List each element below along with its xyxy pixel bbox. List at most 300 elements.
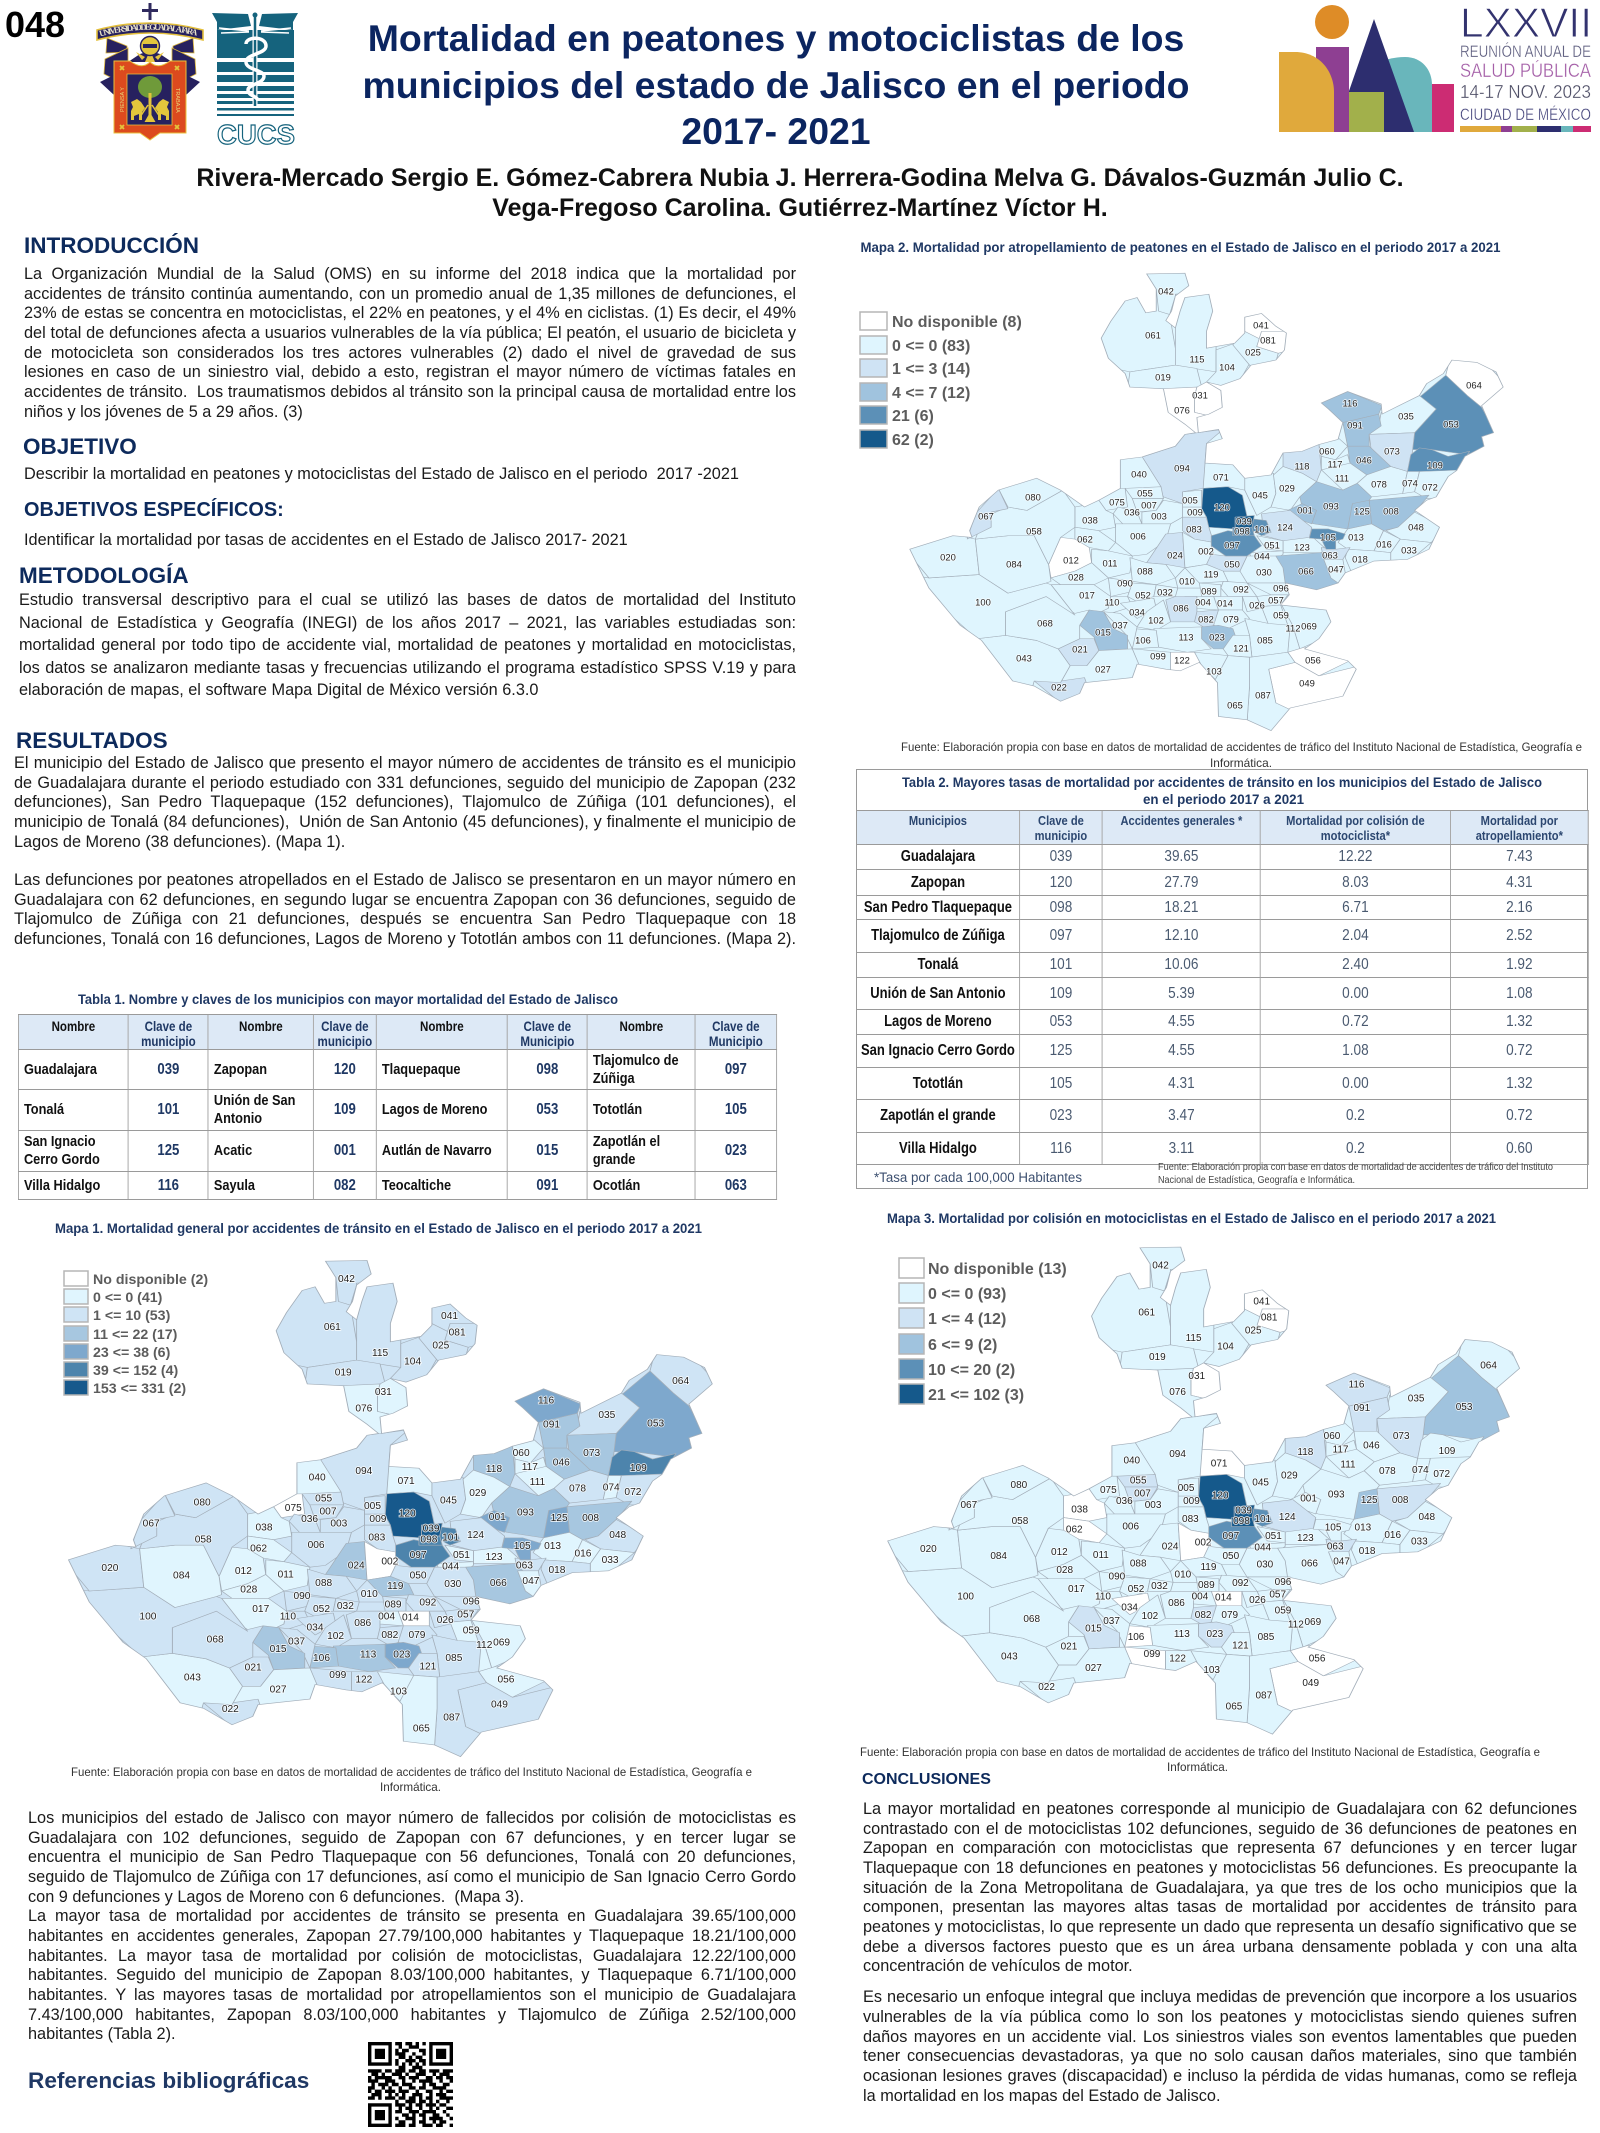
logo: Universidad de Guadalajara crest: PIENSA Y bbox=[120, 87, 126, 112]
map 1: mortalidad general: 124 bbox=[467, 1530, 484, 1541]
map 2: atropellamiento de peatones: 120 bbox=[1214, 502, 1230, 512]
map 3: colisión en motociclistas: 009 bbox=[1183, 1496, 1200, 1507]
map 3: colisión en motociclistas: 066 bbox=[1301, 1559, 1318, 1570]
map 3: colisión en motociclistas: 031 bbox=[1188, 1371, 1206, 1382]
map 1: mortalidad general: 018 bbox=[548, 1565, 566, 1576]
table 2: mayores tasas de mortalidad: 0.60 bbox=[1506, 1140, 1533, 1156]
map 1: mortalidad general: 118 bbox=[486, 1464, 502, 1475]
map 3: colisión en motociclistas: 089 bbox=[1198, 1580, 1215, 1591]
map 2: atropellamiento de peatones: 106 bbox=[1135, 634, 1151, 646]
map 3: colisión en motociclistas: 042 bbox=[1152, 1260, 1169, 1271]
map 3: colisión en motociclistas: 111 bbox=[1340, 1460, 1356, 1471]
map 3: colisión en motociclistas: 105 bbox=[1325, 1522, 1342, 1533]
caption: tabla 2 title: Tabla 2. Mayores tasas de mortalidad por accidentes de tránsito en los municipios del Estado de Jalisco bbox=[902, 775, 1542, 790]
map 1: mortalidad general: 010 bbox=[361, 1589, 378, 1600]
map 3: colisión en motociclistas: 006 bbox=[1122, 1521, 1139, 1532]
map 2: atropellamiento de peatones: 047 bbox=[1328, 564, 1344, 574]
table 2: mayores tasas de mortalidad: 0.2 bbox=[1346, 1107, 1365, 1124]
map 2: atropellamiento de peatones: 117 bbox=[1328, 458, 1342, 470]
map 1: mortalidad general: 116 bbox=[538, 1396, 555, 1407]
map 2: atropellamiento de peatones: 092 bbox=[1233, 584, 1249, 594]
map 3: colisión en motociclistas: 028 bbox=[1056, 1565, 1073, 1576]
map 3: colisión en motociclistas: 055 bbox=[1130, 1476, 1147, 1487]
map 2: atropellamiento de peatones: 057 bbox=[1268, 594, 1284, 606]
map 2: atropellamiento de peatones: 018 bbox=[1352, 554, 1368, 564]
map 3: colisión en motociclistas: 015 bbox=[1085, 1624, 1102, 1635]
table 1: municipios y claves: Zapopan bbox=[214, 1060, 267, 1078]
text: conclusiones párrafo 1: debe a diversos factores puesto que es un área urbana densamente poblada y con una alta bbox=[863, 1938, 1577, 1956]
map 3: colisión en motociclistas: 047 bbox=[1333, 1557, 1350, 1568]
table 2: mayores tasas de mortalidad: 116 bbox=[1050, 1140, 1072, 1156]
map 1: mortalidad general: 078 bbox=[569, 1484, 586, 1495]
map 1: mortalidad general: 047 bbox=[522, 1576, 540, 1587]
map 3: colisión en motociclistas: 064 bbox=[1480, 1361, 1497, 1372]
table 2: mayores tasas de mortalidad: 0.2 bbox=[1346, 1140, 1365, 1156]
table 2: mayores tasas de mortalidad bbox=[856, 769, 1588, 1189]
table 2: mayores tasas de mortalidad: 12.22 bbox=[1338, 848, 1372, 865]
map 1: mortalidad general: 091 bbox=[543, 1420, 560, 1431]
table 2: mayores tasas de mortalidad: 3.47 bbox=[1168, 1107, 1195, 1124]
map 3: colisión en motociclistas: 109 bbox=[1439, 1446, 1456, 1457]
map 3: colisión en motociclistas: 037 bbox=[1103, 1616, 1120, 1627]
map 2: atropellamiento de peatones: 098 bbox=[1234, 526, 1250, 536]
map 1: mortalidad general: 085 bbox=[445, 1653, 463, 1664]
map 1: mortalidad general: 083 bbox=[368, 1532, 386, 1543]
map 3: colisión en motociclistas: 118 bbox=[1297, 1447, 1314, 1458]
table 2: mayores tasas de mortalidad: San Pedro Tlaquepaque bbox=[864, 898, 1012, 916]
map 3: colisión en motociclistas: 013 bbox=[1355, 1522, 1372, 1533]
table 2: mayores tasas de mortalidad: Municipios bbox=[909, 813, 967, 828]
heading: metodología: METODOLOGÍA bbox=[19, 563, 189, 588]
map 1: mortalidad general: 075 bbox=[285, 1503, 302, 1514]
map 1: mortalidad general: 109 bbox=[630, 1463, 647, 1474]
text: introducción: accidentes de tránsito continúa aumentando, con un promedio anual de 1,35 millones de defunciones, el bbox=[24, 285, 796, 303]
map 3: colisión en motociclistas: 065 bbox=[1226, 1701, 1243, 1712]
text: introducción: del total de defunciones afecta a usuarios vulnerables de la vía pública; El peatón, el usuario de bicicleta y bbox=[24, 324, 796, 342]
table 1: municipios y claves: Antonio bbox=[214, 1110, 262, 1127]
authors: Rivera-Mercado Sergio E. Gómez-Cabrera Nubia J. Herrera-Godina Melva G. Dávalos-Guzmán Julio C. bbox=[196, 164, 1404, 192]
map 2: atropellamiento de peatones: 036 bbox=[1124, 506, 1140, 518]
legend: map 2: 4 <= 7 (12) bbox=[892, 385, 970, 402]
map 2: atropellamiento de peatones: 062 bbox=[1077, 534, 1093, 544]
table 2: mayores tasas de mortalidad: Zapopan bbox=[911, 874, 965, 890]
map 3: colisión en motociclistas: 048 bbox=[1418, 1512, 1436, 1523]
table 2: mayores tasas de mortalidad: 053 bbox=[1050, 1013, 1072, 1030]
map 1: mortalidad general: 073 bbox=[583, 1448, 601, 1459]
map 1: mortalidad general: 087 bbox=[443, 1713, 461, 1724]
table 2: mayores tasas de mortalidad: 8.03 bbox=[1342, 874, 1369, 890]
map 2: atropellamiento de peatones: 030 bbox=[1256, 566, 1272, 578]
map 3: colisión en motociclistas: 036 bbox=[1116, 1496, 1133, 1507]
table 1: municipios y claves: Villa Hidalgo bbox=[24, 1176, 100, 1194]
table 2: mayores tasas de mortalidad: Tlajomulco de Zúñiga bbox=[871, 927, 1005, 944]
map 3: colisión en motociclistas: 011 bbox=[1093, 1550, 1109, 1561]
map 3: colisión en motociclistas: 080 bbox=[1011, 1480, 1028, 1491]
text: resultados párrafo 1: municipio de Tonalá (84 defunciones), Unión de San Antonio (45 defunciones), y finalmente el municipio de bbox=[14, 813, 796, 831]
title: 2017- 2021 bbox=[681, 110, 871, 152]
text: tasas y motociclistas: habitantes. Y las mayores tasas de mortalidad por atropellamientos son el municipio de Guadalajara bbox=[28, 1986, 796, 2004]
map 2: atropellamiento de peatones: 058 bbox=[1026, 526, 1042, 536]
map 2: atropellamiento de peatones: 055 bbox=[1137, 488, 1153, 498]
map 2: atropellamiento de peatones: 035 bbox=[1398, 410, 1414, 422]
map 1: mortalidad general: 071 bbox=[398, 1476, 415, 1487]
table 2: mayores tasas de mortalidad: 105 bbox=[1050, 1074, 1072, 1092]
map 1: mortalidad general: 056 bbox=[497, 1675, 515, 1686]
text: resultados párrafo 1: Lagos de Moreno (38 defunciones). (Mapa 1). bbox=[14, 833, 345, 851]
text: conclusiones párrafo 2: Es necesario un enfoque integral que incluya medidas de prevención que incorpore a los usuarios bbox=[863, 1988, 1577, 2006]
text: tasas y motociclistas: habitantes (Tabla 2). bbox=[28, 2025, 176, 2043]
source: mapa 1 line 2: Informática. bbox=[380, 1780, 441, 1794]
map 1: mortalidad general: 020 bbox=[101, 1563, 119, 1574]
table 1: municipios y claves: Tototlán bbox=[593, 1101, 642, 1118]
map 3: colisión en motociclistas: 022 bbox=[1038, 1682, 1055, 1693]
map 3: colisión en motociclistas: 073 bbox=[1393, 1431, 1410, 1442]
map 2: atropellamiento de peatones: 061 bbox=[1145, 330, 1161, 340]
map 2: atropellamiento de peatones: 025 bbox=[1245, 346, 1261, 358]
map 2: atropellamiento de peatones: 028 bbox=[1068, 572, 1084, 582]
title: municipios del estado de Jalisco en el periodo bbox=[363, 64, 1189, 106]
map 2: atropellamiento de peatones: 005 bbox=[1182, 494, 1198, 506]
map 1: mortalidad general: 006 bbox=[308, 1540, 325, 1551]
map 1: mortalidad general: 080 bbox=[194, 1498, 211, 1509]
map 2: atropellamiento de peatones: 093 bbox=[1323, 500, 1339, 512]
map 1: mortalidad general: 122 bbox=[355, 1675, 373, 1686]
legend: map 1: 23 <= 38 (6) bbox=[93, 1345, 171, 1361]
map 2: atropellamiento de peatones: 080 bbox=[1025, 492, 1041, 502]
text: resultados párrafo 1: El municipio del Estado de Jalisco que presento el mayor número de accidentes de tránsito es el municipio bbox=[14, 754, 796, 772]
map 2: atropellamiento de peatones: 091 bbox=[1347, 420, 1363, 430]
map 1: mortalidad general: 029 bbox=[469, 1488, 487, 1499]
logo: LXXVII Reunión Anual de Salud Pública: LXXVII bbox=[1460, 0, 1592, 46]
map 1: mortalidad general: 069 bbox=[493, 1638, 510, 1649]
map 3: colisión en motociclistas: 057 bbox=[1269, 1590, 1286, 1601]
table 1: municipios y claves: Clave de municipio bbox=[141, 1019, 196, 1049]
table 2: mayores tasas de mortalidad: Mortalidad por colisión de motociclista* bbox=[1286, 813, 1425, 843]
table 1: municipios y claves: Clave de Municipio bbox=[520, 1019, 574, 1049]
map 3: colisión en motociclistas: 125 bbox=[1361, 1495, 1378, 1506]
map 2: atropellamiento de peatones: 041 bbox=[1253, 320, 1269, 330]
map 3: colisión en motociclistas: 121 bbox=[1232, 1641, 1249, 1652]
map 1: mortalidad general: 058 bbox=[195, 1535, 212, 1546]
table 1: municipios y claves: Zúñiga bbox=[593, 1070, 635, 1086]
poster number: 048 bbox=[5, 4, 65, 45]
map 1: mortalidad general: 097 bbox=[410, 1550, 427, 1561]
map 3: colisión en motociclistas: 120 bbox=[1212, 1491, 1229, 1502]
text: resultados párrafo 2: defunciones, Tonalá con 16 defunciones, Lagos de Moreno y Tototlán ambos con 11 defunciones. (Mapa 2). bbox=[14, 930, 796, 948]
map 3: colisión en motociclistas: 117 bbox=[1333, 1445, 1349, 1456]
map 3: colisión en motociclistas: 076 bbox=[1169, 1387, 1186, 1398]
source: mapa 2 line 2: Informática. bbox=[1210, 756, 1272, 770]
table 2: mayores tasas de mortalidad: 2.04 bbox=[1342, 927, 1369, 944]
map 1: mortalidad general: 034 bbox=[306, 1622, 324, 1633]
text: metodología bbox=[19, 591, 796, 699]
legend: map 3: 10 <= 20 (2) bbox=[928, 1362, 1015, 1379]
text: metodología: Nacional de Estadística y Geografía (INEGI) de los años 2017 – 2021, las variables estudiadas son: bbox=[19, 614, 796, 632]
map 3: colisión en motociclistas: 043 bbox=[1001, 1651, 1018, 1662]
table 2: mayores tasas de mortalidad: 120 bbox=[1050, 874, 1072, 890]
map 1: mortalidad general: 009 bbox=[369, 1514, 387, 1525]
legend: map 3: 21 <= 102 (3) bbox=[928, 1387, 1024, 1404]
map 2: atropellamiento de peatones: 029 bbox=[1279, 482, 1295, 494]
text: tasas y motociclistas: encuentra el municipio de San Pedro Tlaquepaque con 56 defunciones, Tonalá con 20 defunciones, bbox=[28, 1848, 796, 1866]
map 1: mortalidad general: 096 bbox=[463, 1596, 480, 1607]
table 2: mayores tasas de mortalidad: 1.32 bbox=[1506, 1074, 1533, 1092]
map 1: mortalidad general: 030 bbox=[444, 1579, 462, 1590]
text: introducción: accidentes de tránsito. Los traumatismos debidos al tránsito son la principal causa de mortalidad entre los bbox=[24, 383, 796, 401]
map 2: atropellamiento de peatones: 017 bbox=[1079, 590, 1095, 600]
map 3: colisión en motociclistas bbox=[875, 1237, 1537, 1741]
text: tasas y motociclistas: La mayor tasa de mortalidad por accidentes de tránsito se presenta en Guadalajara 39.65/100,000 bbox=[28, 1907, 796, 1925]
legend: map 2: 1 <= 3 (14) bbox=[892, 361, 970, 378]
map 1: mortalidad general: 039 bbox=[423, 1524, 440, 1535]
map 1: mortalidad general: 035 bbox=[598, 1410, 616, 1421]
map 2: atropellamiento de peatones: 053 bbox=[1443, 418, 1459, 430]
map 3: colisión en motociclistas: 123 bbox=[1297, 1533, 1314, 1544]
map 3: colisión en motociclistas: 083 bbox=[1182, 1514, 1199, 1525]
map 3: colisión en motociclistas: 087 bbox=[1256, 1691, 1273, 1702]
text: tasas y motociclistas: Guadalajara con 102 defunciones, seguido de Zapopan con 67 defunciones, y en tercer lugar se bbox=[28, 1829, 796, 1847]
map 1: mortalidad general: 125 bbox=[551, 1513, 568, 1524]
map 1: mortalidad general: 076 bbox=[355, 1403, 373, 1414]
text: objetivos específicos: Identificar la mortalidad por tasas de accidentes en el Estado de Jalisco 2017- 2021 bbox=[24, 531, 628, 549]
table 2: mayores tasas de mortalidad: 0.72 bbox=[1506, 1107, 1533, 1124]
map 1: mortalidad general: 050 bbox=[410, 1570, 427, 1581]
map 1: mortalidad general: 089 bbox=[385, 1600, 402, 1611]
map 3: colisión en motociclistas: 072 bbox=[1433, 1469, 1450, 1480]
text: tasas y motociclistas: habitantes. Seguido del municipio de Zapopan 8.03/100,000 habitantes, y Tlaquepaque 6.71/100,000 bbox=[28, 1966, 796, 1984]
map 3: colisión en motociclistas: 001 bbox=[1300, 1494, 1317, 1505]
map 1: mortalidad general: 123 bbox=[486, 1552, 503, 1563]
map 2: atropellamiento de peatones: 075 bbox=[1109, 496, 1125, 508]
map 1: mortalidad general: 024 bbox=[348, 1561, 365, 1572]
table 2: mayores tasas de mortalidad: 1.08 bbox=[1506, 984, 1533, 1002]
map 1: mortalidad general: 102 bbox=[327, 1631, 344, 1642]
map 1: mortalidad general: 033 bbox=[602, 1555, 619, 1566]
map 3: colisión en motociclistas: 102 bbox=[1142, 1611, 1159, 1622]
map 1: mortalidad general: 079 bbox=[408, 1630, 426, 1641]
map 2: atropellamiento de peatones: 002 bbox=[1198, 546, 1214, 556]
map 3: colisión en motociclistas: 032 bbox=[1151, 1581, 1168, 1592]
map 2: atropellamiento de peatones: 050 bbox=[1224, 558, 1240, 570]
map 1: mortalidad general: 082 bbox=[381, 1630, 399, 1641]
map 2: atropellamiento de peatones: 096 bbox=[1273, 582, 1289, 594]
map 3: colisión en motociclistas: 085 bbox=[1258, 1632, 1275, 1643]
map 2: atropellamiento de peatones: 023 bbox=[1209, 632, 1225, 642]
map 1: mortalidad general: 068 bbox=[207, 1634, 224, 1645]
table 2: mayores tasas de mortalidad: 5.39 bbox=[1168, 984, 1195, 1002]
table 1: municipios y claves: Unión de San bbox=[214, 1092, 295, 1109]
map 2: atropellamiento de peatones: 087 bbox=[1255, 690, 1271, 700]
map 3: colisión en motociclistas: 017 bbox=[1068, 1584, 1085, 1595]
map 3: colisión en motociclistas: 030 bbox=[1257, 1560, 1274, 1571]
map 2: atropellamiento de peatones: 124 bbox=[1277, 522, 1293, 532]
text: conclusiones párrafo 1: La mayor mortalidad en peatones corresponde al municipio de Guadalajara con 62 defunciones bbox=[863, 1800, 1577, 1818]
map 2: atropellamiento de peatones: 006 bbox=[1130, 530, 1146, 542]
map 2: atropellamiento de peatones: 086 bbox=[1173, 602, 1189, 614]
map 2: atropellamiento de peatones: 112 bbox=[1286, 622, 1300, 634]
map 2: atropellamiento de peatones: 100 bbox=[975, 596, 991, 608]
map 1: mortalidad general: 062 bbox=[250, 1543, 267, 1554]
map 1: mortalidad general: 049 bbox=[491, 1700, 508, 1711]
map 2: atropellamiento de peatones: 059 bbox=[1273, 610, 1289, 620]
map 3: colisión en motociclistas: 052 bbox=[1128, 1584, 1145, 1595]
map 2: atropellamiento de peatones: 089 bbox=[1201, 586, 1217, 596]
map 3: colisión en motociclistas: 088 bbox=[1130, 1559, 1147, 1570]
table 2 footnote: *Tasa por cada 100,000 Habitantes bbox=[874, 1170, 1082, 1185]
map 1: mortalidad general: 117 bbox=[522, 1462, 538, 1473]
map 2: atropellamiento de peatones: 008 bbox=[1383, 506, 1399, 516]
text: conclusiones párrafo 1: concentración de vehículos de motor. bbox=[863, 1957, 1133, 1975]
map 1: mortalidad general: 061 bbox=[324, 1322, 341, 1333]
table 1: municipios y claves: 125 bbox=[157, 1142, 179, 1159]
map 1: mortalidad general: 103 bbox=[390, 1686, 407, 1697]
map 2: atropellamiento de peatones: 060 bbox=[1319, 446, 1335, 456]
map 2: atropellamiento de peatones: 010 bbox=[1179, 576, 1195, 586]
map 3: colisión en motociclistas: 012 bbox=[1051, 1547, 1068, 1558]
map 2: atropellamiento de peatones: 105 bbox=[1320, 532, 1336, 542]
map 2: atropellamiento de peatones: 078 bbox=[1371, 478, 1387, 490]
text: introducción: La Organización Mundial de la Salud (OMS) en su informe del 2018 indica que la mortalidad por bbox=[24, 265, 796, 283]
table 2: mayores tasas de mortalidad: Lagos de Moreno bbox=[884, 1013, 992, 1030]
map 2: atropellamiento de peatones: 056 bbox=[1305, 654, 1321, 666]
title bbox=[363, 17, 1189, 152]
legend: map 1: 11 <= 22 (17) bbox=[93, 1327, 178, 1343]
legend: map 2: 0 <= 0 (83) bbox=[892, 338, 970, 355]
map 3: colisión en motociclistas: 021 bbox=[1061, 1642, 1078, 1653]
map 3: colisión en motociclistas: 059 bbox=[1275, 1606, 1292, 1617]
text: conclusiones párrafo 1: situación de la Zona Metropolitana de Guadalajara, ya que tres de los ocho municipios que la bbox=[863, 1879, 1577, 1897]
map 3: colisión en motociclistas: 063 bbox=[1327, 1542, 1344, 1553]
map 2: atropellamiento de peatones: 119 bbox=[1204, 568, 1218, 580]
authors bbox=[196, 164, 1404, 222]
text: resultados párrafo 1 bbox=[14, 754, 796, 851]
text: tasas y motociclistas: Los municipios del estado de Jalisco con mayor número de fallecidos por colisión de motociclistas es bbox=[28, 1809, 796, 1827]
text: resultados párrafo 2: Las defunciones por peatones atropellados en el Estado de Jalisco se presentaron en un mayor número en bbox=[14, 871, 796, 889]
map 2: atropellamiento de peatones: 102 bbox=[1148, 614, 1164, 626]
table 2: mayores tasas de mortalidad: Unión de San Antonio bbox=[870, 984, 1006, 1002]
table 2: mayores tasas de mortalidad: 039 bbox=[1050, 848, 1072, 865]
map 2: atropellamiento de peatones: 081 bbox=[1260, 334, 1276, 346]
map 2: atropellamiento de peatones: 094 bbox=[1174, 462, 1190, 474]
map 1: mortalidad general: 113 bbox=[360, 1650, 377, 1661]
map 2: atropellamiento de peatones: 065 bbox=[1227, 700, 1243, 710]
map 1: mortalidad general: 043 bbox=[184, 1672, 201, 1683]
map 3: colisión en motociclistas: 119 bbox=[1200, 1562, 1217, 1573]
legend: map 3: 6 <= 9 (2) bbox=[928, 1337, 997, 1354]
legend: map 1: No disponible (2) bbox=[93, 1272, 208, 1288]
map 2: atropellamiento de peatones: 001 bbox=[1297, 504, 1313, 516]
map 1: mortalidad general: 106 bbox=[313, 1653, 330, 1664]
map 2: atropellamiento de peatones: 045 bbox=[1252, 490, 1268, 500]
table 2: mayores tasas de mortalidad: Tototlán bbox=[913, 1074, 963, 1092]
map 3: colisión en motociclistas: 081 bbox=[1261, 1313, 1278, 1324]
map 3: colisión en motociclistas: 068 bbox=[1023, 1614, 1040, 1625]
map 3: colisión en motociclistas: 060 bbox=[1324, 1431, 1341, 1442]
table 2: mayores tasas de mortalidad: 0.72 bbox=[1506, 1042, 1533, 1059]
map 2: atropellamiento de peatones: 076 bbox=[1174, 404, 1190, 416]
map 1: mortalidad general: 038 bbox=[256, 1523, 273, 1534]
heading: resultados: RESULTADOS bbox=[16, 728, 168, 753]
map 1: mortalidad general: 040 bbox=[309, 1473, 326, 1484]
map 3: colisión en motociclistas: 093 bbox=[1328, 1489, 1345, 1500]
table 2: mayores tasas de mortalidad: Tonalá bbox=[917, 956, 958, 973]
legend: map 1 bbox=[64, 1271, 208, 1397]
map 3: colisión en motociclistas: 053 bbox=[1456, 1402, 1473, 1413]
map 3: colisión en motociclistas: 086 bbox=[1168, 1598, 1185, 1609]
table 2: mayores tasas de mortalidad: 39.65 bbox=[1164, 848, 1198, 865]
map 1: mortalidad general: 067 bbox=[143, 1518, 160, 1529]
map 3: colisión en motociclistas: 079 bbox=[1221, 1610, 1239, 1621]
map 3: colisión en motociclistas: 092 bbox=[1232, 1578, 1249, 1589]
text: conclusiones párrafo 2: tener consecuencias devastadoras, ya que no solo causan daños materiales, sino que también bbox=[863, 2047, 1577, 2065]
map 1: mortalidad general: 092 bbox=[419, 1598, 437, 1609]
text: metodología: elaboración de mapas, el software Mapa Digital de México versión 6.3.0 bbox=[19, 681, 538, 699]
text: resultados párrafo 1: de Guadalajara durante el periodo estudiado con 331 defunciones, seguido del municipio de Zapopan (232 bbox=[14, 774, 796, 792]
map 1: mortalidad general: 053 bbox=[647, 1418, 665, 1429]
map 1: mortalidad general: 016 bbox=[574, 1549, 592, 1560]
map 1: mortalidad general: 072 bbox=[624, 1487, 642, 1498]
text: introducción bbox=[24, 265, 796, 421]
map 1: mortalidad general: 005 bbox=[364, 1501, 381, 1512]
map 3: colisión en motociclistas: 058 bbox=[1012, 1516, 1029, 1527]
map 1: mortalidad general: 104 bbox=[404, 1357, 421, 1368]
table 1: municipios y claves: Clave de municipio bbox=[318, 1019, 372, 1049]
map 2: atropellamiento de peatones: 013 bbox=[1348, 532, 1364, 542]
table 2: mayores tasas de mortalidad: 097 bbox=[1050, 927, 1072, 944]
caption: tabla 1 title: Tabla 1. Nombre y claves de los municipios con mayor mortalidad del Estado de Jalisco bbox=[78, 992, 618, 1007]
table 1: municipios y claves: Acatic bbox=[214, 1142, 252, 1159]
map 3: colisión en motociclistas: 124 bbox=[1279, 1512, 1296, 1523]
table 1: municipios y claves bbox=[18, 1014, 778, 1200]
map 2: atropellamiento de peatones: 037 bbox=[1112, 620, 1128, 630]
heading: referencias: Referencias bibliográficas bbox=[28, 2068, 309, 2093]
map 3: colisión en motociclistas: 051 bbox=[1265, 1531, 1282, 1542]
map 3: colisión en motociclistas: 110 bbox=[1095, 1592, 1111, 1603]
map 1: mortalidad general: 100 bbox=[139, 1612, 157, 1623]
map 3: colisión en motociclistas: 039 bbox=[1235, 1505, 1252, 1516]
map 3: colisión en motociclistas: 106 bbox=[1128, 1632, 1145, 1643]
map 1: mortalidad general: 028 bbox=[240, 1584, 258, 1595]
map 1: mortalidad general: 037 bbox=[288, 1637, 305, 1648]
map 1: mortalidad general: 101 bbox=[442, 1532, 459, 1543]
map 3: colisión en motociclistas: 025 bbox=[1245, 1325, 1262, 1336]
map 2: atropellamiento de peatones: 048 bbox=[1408, 522, 1424, 532]
map 3: colisión en motociclistas: 097 bbox=[1222, 1531, 1240, 1542]
map 3: colisión en motociclistas: 026 bbox=[1249, 1595, 1266, 1606]
legend: map 1: 0 <= 0 (41) bbox=[93, 1290, 163, 1306]
map 1: mortalidad general: 013 bbox=[544, 1541, 561, 1552]
source: mapa 2: Fuente: Elaboración propia con base en datos de mortalidad de accidentes de tráfico del Instituto Nacional de Estadística, Geografía e bbox=[901, 740, 1582, 754]
text: conclusiones párrafo 2 bbox=[863, 1988, 1577, 2105]
map 1: mortalidad general: 045 bbox=[440, 1496, 457, 1507]
map 2: atropellamiento de peatones: 088 bbox=[1137, 566, 1153, 576]
map 3: colisión en motociclistas: 084 bbox=[990, 1551, 1007, 1562]
map 3: colisión en motociclistas: 056 bbox=[1309, 1653, 1326, 1664]
table 1: municipios y claves: Nombre bbox=[420, 1019, 464, 1034]
map 2: atropellamiento de peatones bbox=[898, 264, 1520, 737]
title: Mortalidad en peatones y motociclistas de los bbox=[368, 17, 1184, 59]
table 2 source: Fuente: Elaboración propia con base en datos de mortalidad de accidentes de tráfico del Instituto bbox=[1158, 1162, 1553, 1173]
map 3: colisión en motociclistas: 091 bbox=[1353, 1403, 1371, 1414]
source: mapa 3 line 2: Informática. bbox=[1167, 1760, 1228, 1774]
legend: map 3: 0 <= 0 (93) bbox=[928, 1286, 1006, 1303]
text: tasas y motociclistas: seguido de Tlajomulco de Zúñiga con 17 defunciones, así como el municipio de San Ignacio Cerro Gordo bbox=[28, 1868, 796, 1886]
text: tasas y motociclistas bbox=[28, 1809, 796, 2043]
legend: map 1: 1 <= 10 (53) bbox=[93, 1308, 171, 1324]
map 1: mortalidad general: 057 bbox=[457, 1609, 475, 1620]
legend: map 2: 62 (2) bbox=[892, 432, 934, 449]
text: introducción: de motocicleta son considerados los tres actores vulnerables (2) dado el nivel de gravedad de sus bbox=[24, 344, 796, 362]
